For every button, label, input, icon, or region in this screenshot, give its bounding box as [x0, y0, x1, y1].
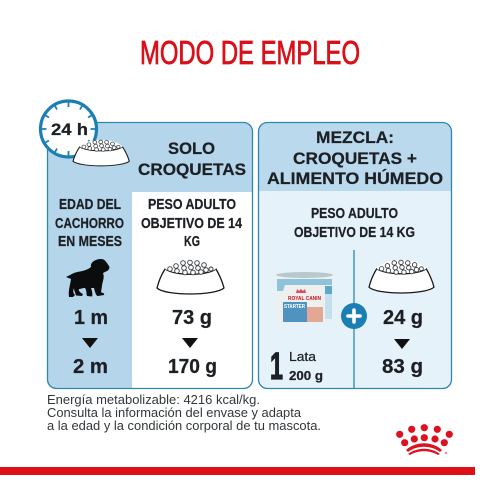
gram values	[382, 307, 423, 378]
can quantity: 200 g	[289, 368, 323, 383]
icon: 24 h clock: 24 h	[51, 120, 88, 139]
heading: solo croquetas: SOLO	[168, 139, 215, 158]
title: MODO DE EMPLEO	[140, 34, 360, 71]
column heading: edad del cachorro: EDAD DEL	[59, 196, 121, 213]
gram values: 24 g	[383, 307, 423, 329]
icon: wet food can	[276, 272, 333, 322]
footnote text: Consulta la información del envase y adapta	[47, 406, 301, 420]
can quantity: 1	[270, 346, 283, 388]
footnote text	[47, 393, 321, 433]
heading: mezcla: MEZCLA:	[316, 128, 394, 147]
heading: solo croquetas	[138, 139, 246, 179]
heading: mezcla: CROQUETAS +	[293, 149, 417, 168]
column heading: peso adulto: OBJETIVO DE 14	[141, 215, 243, 232]
column heading: peso adulto	[294, 205, 415, 241]
icon: royal canin crown	[396, 424, 453, 455]
column heading: edad del cachorro	[55, 196, 124, 250]
footnote text: a la edad y la condición corporal de tu mascota.	[47, 419, 321, 433]
heading: mezcla: ALIMENTO HÚMEDO	[267, 169, 443, 188]
panel: solo croquetas	[48, 122, 252, 388]
gram values: 73 g	[172, 307, 212, 329]
column heading: peso adulto: OBJETIVO DE 14 KG	[294, 224, 415, 241]
age values: 2 m	[73, 356, 108, 378]
icon: wet food can: ROYAL CANIN	[288, 296, 321, 302]
gram values	[168, 307, 217, 378]
icon: header bowl	[73, 140, 129, 166]
heading: solo croquetas: CROQUETAS	[138, 160, 246, 179]
icon: plus	[341, 303, 367, 329]
icon: 24 h clock	[40, 101, 96, 157]
column heading: edad del cachorro: EN MESES	[58, 233, 122, 250]
icon: puppy silhouette	[66, 259, 109, 297]
gram values: 83 g	[382, 356, 423, 378]
gram values: 170 g	[168, 356, 217, 378]
age values	[73, 307, 108, 378]
red footer bar	[0, 467, 475, 475]
can quantity	[270, 346, 323, 388]
icon: wet food can: STARTER	[284, 304, 305, 310]
footnote text: Energía metabolizable: 4216 kcal/kg.	[47, 393, 260, 407]
icon: food bowl	[157, 260, 224, 294]
age values: 1 m	[74, 307, 108, 329]
column heading: peso adulto	[141, 196, 243, 250]
heading: mezcla	[267, 128, 443, 188]
column heading: edad del cachorro: CACHORRO	[55, 215, 124, 232]
can quantity: Lata	[289, 349, 317, 364]
column heading: peso adulto: PESO ADULTO	[311, 205, 398, 222]
panel: mezcla	[258, 122, 452, 389]
icon: food bowl	[369, 260, 434, 293]
column heading: peso adulto: KG	[184, 233, 200, 250]
column heading: peso adulto: PESO ADULTO	[148, 196, 236, 213]
